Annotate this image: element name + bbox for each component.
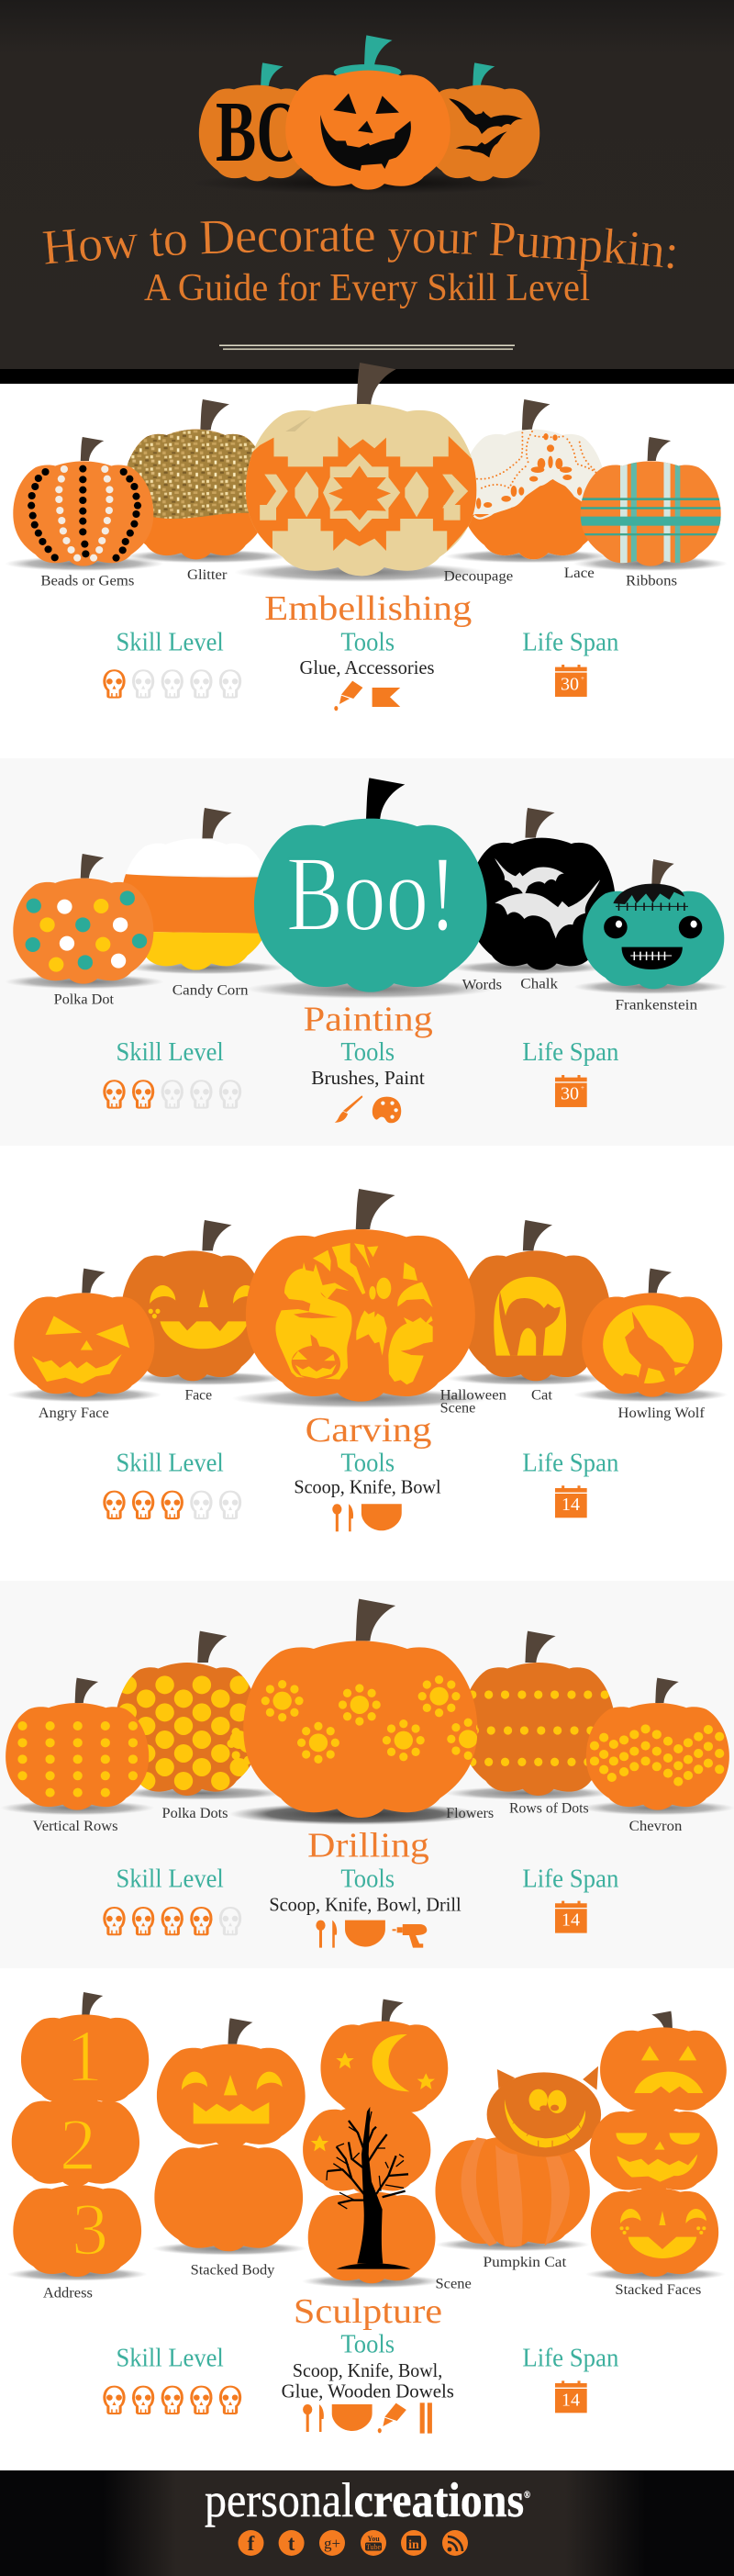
pumpkin: flowers xyxy=(243,1599,489,1818)
title: How to Decorate your Pumpkin: xyxy=(42,220,675,272)
heading: Life Span: Life Span xyxy=(522,1865,618,1894)
heading: Sculpture: Sculpture xyxy=(294,2292,442,2331)
icon: twitter xyxy=(279,2530,305,2556)
label: Decoupage: Decoupage xyxy=(444,568,513,584)
label: Vertical Rows: Vertical Rows xyxy=(33,1819,118,1834)
calendar icon: 30 plus days: 30 xyxy=(561,1084,579,1104)
pumpkin lettering: Boo!: Boo! xyxy=(286,834,457,954)
icon: facebook: f xyxy=(248,2532,255,2555)
label: Howling Wolf: Howling Wolf xyxy=(618,1406,706,1421)
label: Pumpkin Cat: Pumpkin Cat xyxy=(483,2255,567,2270)
label: Candy Corn: Candy Corn xyxy=(172,982,248,998)
pumpkin number: 3: 3 xyxy=(72,2190,108,2270)
pumpkins: drilling row xyxy=(0,1599,734,1825)
tool icons: scoop, knife, bowl xyxy=(332,1504,402,1531)
centre jack-o-lantern xyxy=(285,35,450,190)
pumpkin: beads or gems xyxy=(13,437,153,566)
skill level: 3 of 5 skulls xyxy=(105,1492,240,1518)
pumpkin: howling wolf xyxy=(582,1269,722,1397)
heading: Carving: Carving xyxy=(306,1411,431,1450)
tools list: Brushes, Paint xyxy=(311,1067,425,1089)
heading: Painting: Painting xyxy=(304,1000,433,1038)
calendar icon: 14 days xyxy=(555,2380,587,2413)
social icons xyxy=(239,2530,468,2556)
label: Lace: Lace xyxy=(564,566,595,581)
icon: facebook xyxy=(239,2530,264,2556)
icon: linkedin xyxy=(401,2530,427,2556)
icon: twitter: t xyxy=(288,2532,295,2555)
tools list xyxy=(282,2359,454,2402)
pumpkin: chevron xyxy=(586,1678,729,1810)
tools list: Glue, Accessories xyxy=(299,656,435,678)
pumpkin: vertical rows xyxy=(6,1678,149,1810)
calendar icon: 14 days xyxy=(555,1901,587,1933)
label: Chevron: Chevron xyxy=(629,1819,682,1834)
calendar icon: 30 plus days: + xyxy=(581,675,584,682)
label: Stacked Faces: Stacked Faces xyxy=(615,2282,701,2298)
heading: Skill Level: Skill Level xyxy=(116,2344,224,2372)
icon: youtube: Tube xyxy=(366,2543,382,2551)
label: Flowers: Flowers xyxy=(446,1806,494,1821)
panel: header xyxy=(0,0,734,384)
calendar icon: 30 plus days xyxy=(555,665,587,697)
calendar icon: 30 plus days: 30 xyxy=(561,675,579,695)
heading: Tools: Tools xyxy=(340,1865,395,1894)
icon: rss xyxy=(442,2530,468,2556)
pumpkin: candy corn xyxy=(123,808,262,970)
pumpkin: centre cream with geometric pattern xyxy=(241,363,483,576)
pumpkin number: 2: 2 xyxy=(60,2105,96,2186)
heading: Drilling: Drilling xyxy=(307,1826,429,1865)
pumpkins: sculpture row xyxy=(7,1992,727,2288)
pumpkin stack: address xyxy=(12,1992,149,2277)
logo: personalcreations: personalcreations xyxy=(205,2474,542,2527)
pumpkin: cat xyxy=(462,1220,611,1381)
heading: Tools: Tools xyxy=(340,1450,395,1478)
skill level: 2 of 5 skulls xyxy=(105,1081,240,1108)
label: Glitter: Glitter xyxy=(187,567,228,583)
label: Polka Dot: Polka Dot xyxy=(54,991,115,1007)
heading: Life Span: Life Span xyxy=(522,628,618,656)
panel: embellishing xyxy=(9,363,725,711)
label: Frankenstein: Frankenstein xyxy=(615,997,697,1013)
pumpkins: carving row xyxy=(7,1189,728,1408)
label: Rows of Dots: Rows of Dots xyxy=(509,1800,589,1816)
tool icons: glue and accessory flag xyxy=(334,681,400,711)
heading: Life Span: Life Span xyxy=(522,2344,618,2372)
pumpkin stack: stacked body xyxy=(154,2018,306,2251)
pumpkin: glitter xyxy=(127,399,258,560)
panel: drilling xyxy=(0,1581,734,1968)
pumpkin number: 1: 1 xyxy=(66,2017,103,2098)
subtitle: A Guide for Every Skill Level xyxy=(144,267,590,309)
pumpkin: decoupage and lace xyxy=(468,399,602,560)
heading: Life Span: Life Span xyxy=(522,1450,618,1478)
tools list: Scoop, Knife, Bowl, Drill xyxy=(269,1894,462,1916)
panel: carving xyxy=(11,1189,725,1531)
label: Polka Dots: Polka Dots xyxy=(161,1806,228,1821)
pumpkin: ribbons xyxy=(576,437,726,569)
label: Scene: Scene xyxy=(435,2276,472,2291)
logo: personalcreations: ® xyxy=(524,2491,530,2501)
label: Face: Face xyxy=(185,1388,212,1404)
panel: footer xyxy=(0,2470,734,2576)
logo illustration: three pumpkins xyxy=(192,35,548,194)
icon: google plus: g+ xyxy=(324,2535,340,2552)
calendar icon: 30 plus days: + xyxy=(581,1084,584,1092)
skill level: 4 of 5 skulls xyxy=(105,1908,240,1934)
pumpkins behind: left and right with bats xyxy=(192,62,548,194)
label: Beads or Gems: Beads or Gems xyxy=(40,573,134,588)
pumpkin stack: stacked faces xyxy=(590,2011,727,2277)
tool icons: brush and palette xyxy=(335,1095,401,1123)
icon: linkedin: in xyxy=(408,2538,419,2552)
pumpkin: rows of dots xyxy=(462,1631,616,1796)
label: Chalk: Chalk xyxy=(520,977,558,992)
skill level: 5 of 5 skulls xyxy=(105,2387,240,2414)
label: Halloween Scene: Halloween xyxy=(440,1388,506,1404)
pumpkin lettering: BO: BO xyxy=(216,84,304,180)
tools list: Scoop, Knife, Bowl, xyxy=(293,2359,442,2381)
calendar icon: 30 plus days xyxy=(555,1075,587,1107)
label: Halloween Scene xyxy=(440,1388,506,1417)
icon: youtube xyxy=(361,2530,386,2556)
pumpkin: polka dot xyxy=(13,854,153,984)
calendar icon: 14 days xyxy=(555,1485,587,1518)
calendar icon: 14 days: 14 xyxy=(562,1495,580,1515)
icon: youtube: You xyxy=(367,2535,380,2543)
heading: Tools: Tools xyxy=(340,1038,395,1067)
label: Words: Words xyxy=(462,977,502,992)
heading: Skill Level: Skill Level xyxy=(116,628,224,656)
label: Ribbons: Ribbons xyxy=(626,573,677,588)
pumpkin: angry face xyxy=(14,1269,154,1397)
panel: painting xyxy=(6,778,727,1124)
tool icons: scoop, knife, bowl, glue, dowels xyxy=(303,2402,432,2434)
pumpkins: painting row xyxy=(5,778,728,999)
pumpkin stack: scene with tree and moon xyxy=(303,1999,448,2283)
heading: Tools: Tools xyxy=(340,2330,395,2358)
calendar icon: 14 days: 14 xyxy=(562,2391,580,2411)
heading: Embellishing: Embellishing xyxy=(264,589,472,628)
label: Address: Address xyxy=(43,2286,93,2302)
icon: google plus xyxy=(319,2530,345,2556)
label: Cat: Cat xyxy=(531,1388,553,1404)
pumpkins: embellishing row xyxy=(5,363,728,582)
pumpkin: teal Boo xyxy=(254,778,487,992)
pumpkin: frankenstein xyxy=(583,859,724,989)
heading: Tools: Tools xyxy=(340,628,395,656)
label: Angry Face: Angry Face xyxy=(39,1406,109,1421)
pumpkin: polka dots xyxy=(117,1630,251,1796)
heading: Skill Level: Skill Level xyxy=(116,1450,224,1478)
pumpkin: pumpkin cat xyxy=(435,2066,601,2247)
pumpkin: chalk bats xyxy=(468,808,616,970)
tool icons: scoop, knife, bowl, drill xyxy=(316,1921,427,1948)
label: Stacked Body: Stacked Body xyxy=(191,2263,274,2279)
pumpkin: face xyxy=(121,1220,264,1381)
pumpkin: halloween scene xyxy=(246,1189,475,1402)
calendar icon: 14 days: 14 xyxy=(562,1910,580,1931)
heading: Skill Level: Skill Level xyxy=(116,1865,224,1894)
panel: sculpture xyxy=(0,1968,734,2470)
tools list: Scoop, Knife, Bowl xyxy=(294,1476,441,1498)
tools list: Glue, Wooden Dowels xyxy=(282,2380,454,2402)
skill level: 1 of 5 skulls xyxy=(105,670,240,698)
heading: Skill Level: Skill Level xyxy=(116,1038,224,1067)
heading: Life Span: Life Span xyxy=(522,1038,618,1067)
label: Halloween Scene: Scene xyxy=(440,1401,475,1417)
